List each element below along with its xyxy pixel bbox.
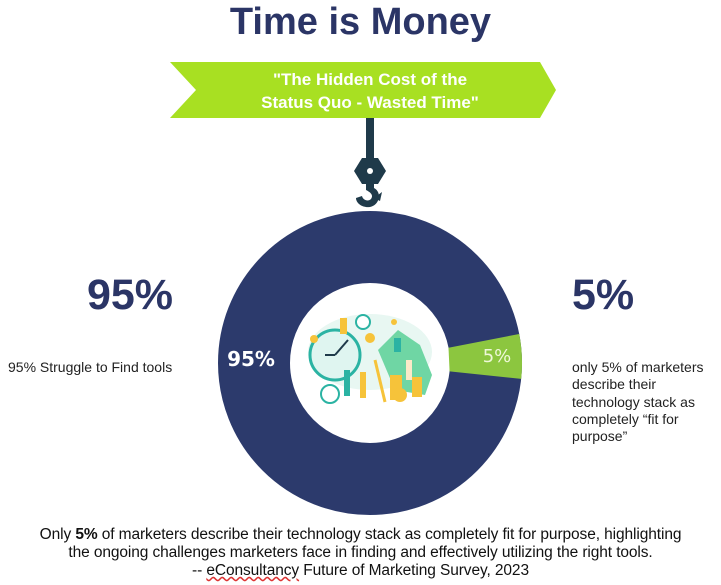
banner: Status Quo - Wasted Time" [261,93,479,112]
donut chart: 5% [483,346,511,367]
footer quote: Only 5% of marketers describe their technology stack as completely fit for purpose, highlighting [40,526,681,543]
text: 5% description: only 5% of marketers describe their technology stack as completely “fit for purpose” [572,359,704,444]
icon: crane hook [354,118,386,207]
footer quote [40,526,681,582]
donut chart [227,247,522,479]
wedge: 5% [448,334,522,379]
banner [170,62,556,118]
label: 95%: 95% [227,347,275,371]
footer quote: the ongoing challenges marketers face in finding and effectively utilizing the right tools. [68,544,653,561]
illustration: time and money [308,314,432,403]
banner: "The Hidden Cost of the [273,70,467,89]
text: 95% struggle: 95% Struggle to Find tools [8,359,172,375]
stat: 5%: 5% [572,271,634,319]
title: Time is Money [230,1,491,43]
stat: 95%: 95% [87,271,173,319]
footer quote: -- eConsultancy Future of Marketing Survey, 2023 [192,562,529,579]
